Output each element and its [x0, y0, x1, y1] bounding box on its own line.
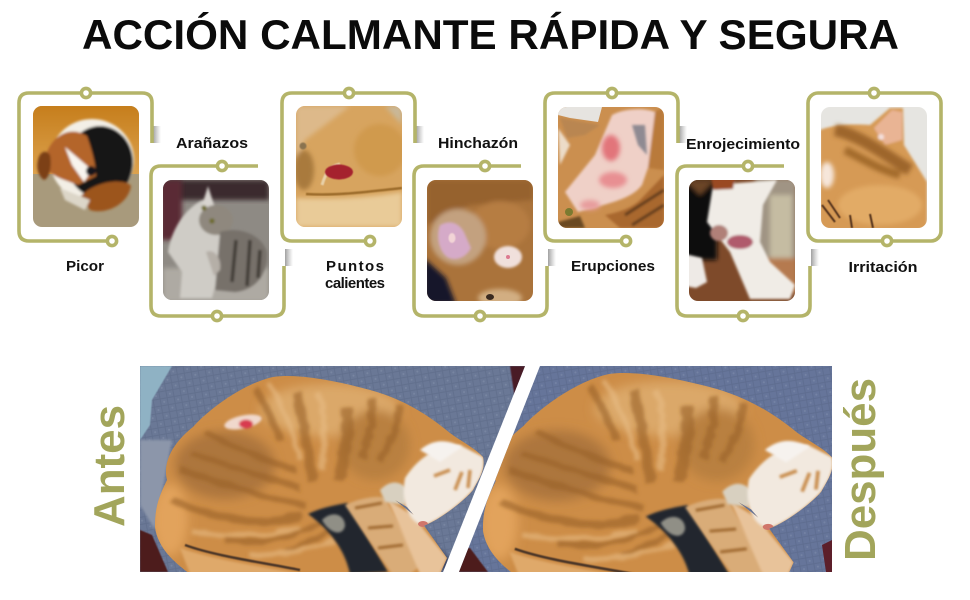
panel: Arañazos	[151, 161, 293, 321]
panel: Enrojecimiento	[677, 161, 819, 321]
panel: Puntos calientes	[282, 88, 424, 246]
photo: orange cat irritation	[820, 107, 927, 230]
title: ACCIÓN CALMANTE RÁPIDA Y SEGURA	[82, 10, 899, 58]
label: Arañazos: Arañazos	[176, 135, 248, 152]
label: Enrojecimiento: Enrojecimiento	[686, 136, 800, 153]
label: Irritación: Irritación	[848, 259, 918, 276]
photo: swollen skin on dog	[424, 180, 533, 307]
label: Antes: Antes	[85, 405, 134, 527]
panel: Hinchazón	[414, 161, 556, 321]
panel: Irritación	[808, 88, 941, 246]
panel: Erupciones	[545, 88, 687, 246]
panel: Picor	[19, 88, 161, 246]
wound	[223, 412, 263, 432]
photo: cat after treatment	[455, 363, 839, 581]
label: Puntos calientes: Puntos	[326, 258, 384, 275]
photo: grey cat scratching	[160, 180, 269, 302]
label: Erupciones: Erupciones	[571, 258, 655, 275]
photo: rash on cat ear	[558, 107, 664, 228]
label: Hinchazón: Hinchazón	[438, 135, 518, 152]
label: Puntos calientes: calientes	[325, 275, 385, 292]
photo: reddened dog leg	[685, 178, 797, 301]
photo: beagle scratching	[33, 106, 139, 227]
label: Después: Después	[836, 378, 885, 561]
photo: cat before treatment	[140, 366, 530, 576]
photo: hot spot on dog	[294, 106, 406, 227]
label: Puntos calientes	[325, 258, 385, 292]
label: Picor: Picor	[66, 258, 104, 275]
